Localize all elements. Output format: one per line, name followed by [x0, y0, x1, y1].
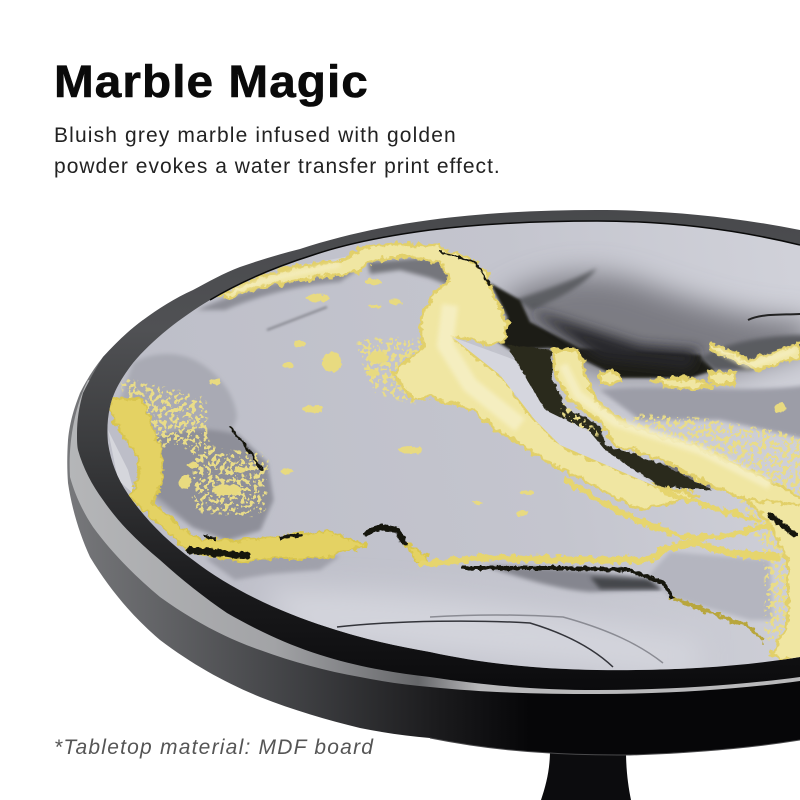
gold veins: [110, 244, 800, 665]
pale wedge in gold: [452, 337, 657, 487]
rim bottom edge line: [430, 738, 800, 755]
gold flecks: [179, 279, 786, 516]
black vein edges: [190, 252, 795, 597]
rim silver highlight: [70, 380, 800, 694]
table stem: [541, 750, 631, 800]
rim top ring: [77, 210, 800, 690]
table rim side: [67, 320, 800, 755]
footnote: *Tabletop material: MDF board: [54, 736, 374, 759]
marble tabletop: [90, 200, 800, 680]
illustration: round marble side table: [67, 210, 800, 800]
cream vein highlights: [232, 265, 796, 485]
grey and black ink washes: [108, 256, 800, 680]
description text: Bluish grey marble infused with golden: [54, 124, 457, 147]
speckled gold dust: [112, 335, 800, 645]
title: Marble Magic: [54, 56, 369, 107]
marble inner edge line: [210, 221, 800, 300]
description text: powder evokes a water transfer print effect.: [54, 155, 501, 178]
dark seam beside pale wedge: [508, 345, 712, 490]
description text: [54, 124, 501, 178]
